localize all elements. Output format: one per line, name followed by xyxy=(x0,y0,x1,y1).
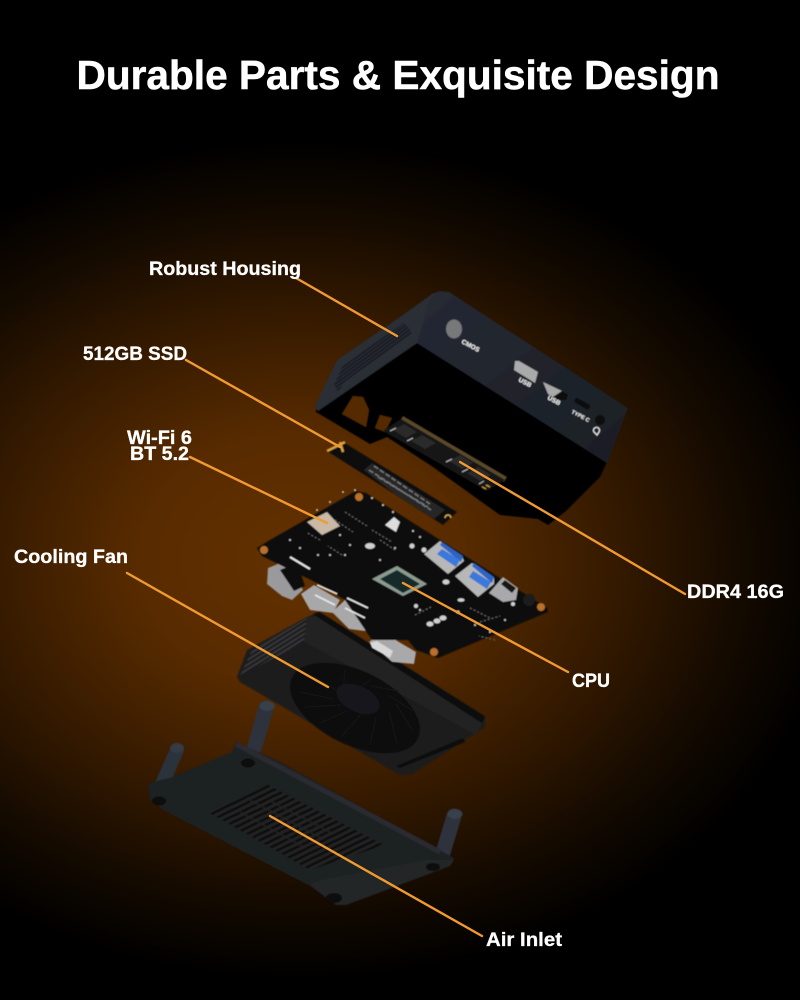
fan hub xyxy=(332,677,384,721)
leader: CPU xyxy=(403,583,568,672)
USB blue port 2 xyxy=(455,563,494,597)
label: 512GB SSD: 512GB SSD xyxy=(83,344,187,365)
title: Durable Parts & Exquisite Design xyxy=(76,52,720,98)
USB-C port xyxy=(489,577,518,602)
leader lines xyxy=(127,278,685,936)
SSD notch xyxy=(445,515,451,518)
silver port A xyxy=(301,585,340,613)
post back-left xyxy=(162,743,184,784)
side vent mesh xyxy=(334,323,412,392)
fan heat sink fins xyxy=(240,618,307,676)
audio jack xyxy=(523,594,535,606)
label: Air Inlet: Air Inlet xyxy=(486,930,563,951)
module board xyxy=(383,419,505,491)
fan blades xyxy=(300,670,413,745)
SSD label sticker xyxy=(364,463,445,519)
fan lower slit xyxy=(396,738,465,768)
HDMI side port xyxy=(267,560,303,600)
CMOS label: CMOS xyxy=(460,339,481,354)
USB port 2 xyxy=(543,382,562,397)
plate rim xyxy=(236,744,440,852)
fan rear slit xyxy=(313,612,485,723)
housing side face xyxy=(315,291,440,411)
part: housing xyxy=(315,291,628,525)
USB blue port 1 xyxy=(424,541,464,574)
USB port 1 xyxy=(514,361,538,383)
housing front face xyxy=(417,291,628,463)
inlet slots xyxy=(208,785,384,870)
part: DDR4 memory module xyxy=(383,416,507,491)
Type-C port xyxy=(574,397,591,410)
leader: Air Inlet xyxy=(270,816,482,936)
plate lower lip xyxy=(310,860,454,905)
memory chips xyxy=(393,424,417,438)
CPU die xyxy=(380,570,420,593)
label: Robust Housing: Robust Housing xyxy=(149,259,301,280)
leader: DDR4 xyxy=(460,462,685,594)
gold edge xyxy=(400,416,507,482)
Type-C label: TYPE C xyxy=(570,409,590,424)
label: Cooling Fan: Cooling Fan xyxy=(14,547,128,568)
USB label 2: USB xyxy=(546,395,562,407)
Wi-Fi module xyxy=(307,512,340,535)
post right xyxy=(442,809,462,856)
USB label 1: USB xyxy=(517,377,533,389)
label: Wi-Fi 6 BT 5.2 xyxy=(127,428,192,465)
label: DDR4 16G: DDR4 16G xyxy=(687,582,784,603)
plate screw holes xyxy=(152,758,440,903)
silver port C slot xyxy=(370,641,393,658)
leader: Cooling Fan xyxy=(127,573,328,687)
reset switch xyxy=(385,517,400,532)
leader: Wi-Fi xyxy=(190,457,327,523)
leader: Robust Housing xyxy=(296,278,397,336)
CPU package xyxy=(372,566,427,596)
fan body xyxy=(237,612,485,775)
audio jack xyxy=(595,415,605,425)
part: base plate xyxy=(148,701,462,905)
mounting screws xyxy=(260,546,268,554)
housing cutouts xyxy=(342,396,369,427)
headset glyph xyxy=(594,427,600,435)
part: cooling fan xyxy=(237,612,485,775)
PCB xyxy=(257,491,548,658)
SSD board xyxy=(327,442,457,525)
fan impeller xyxy=(276,644,434,772)
part: motherboard xyxy=(257,489,548,664)
part: SSD xyxy=(327,442,457,525)
SSD gold connector xyxy=(327,442,345,452)
silver port C xyxy=(369,632,416,664)
silver port B xyxy=(332,600,369,631)
PCB components xyxy=(289,489,515,633)
label: CPU: CPU xyxy=(572,671,610,692)
plate body xyxy=(148,742,454,905)
fan top highlight xyxy=(304,614,485,735)
label: Wi-Fi 6 BT 5.2: Wi-Fi 6 xyxy=(127,428,192,449)
CMOS button xyxy=(446,320,462,338)
component clusters xyxy=(306,512,500,640)
slot dividers xyxy=(240,785,339,846)
label: Wi-Fi 6 BT 5.2: BT 5.2 xyxy=(130,444,189,465)
port openings xyxy=(315,585,368,618)
housing interior xyxy=(316,343,607,525)
post back-centre xyxy=(255,701,274,746)
leader: 512GB SSD xyxy=(186,360,340,447)
